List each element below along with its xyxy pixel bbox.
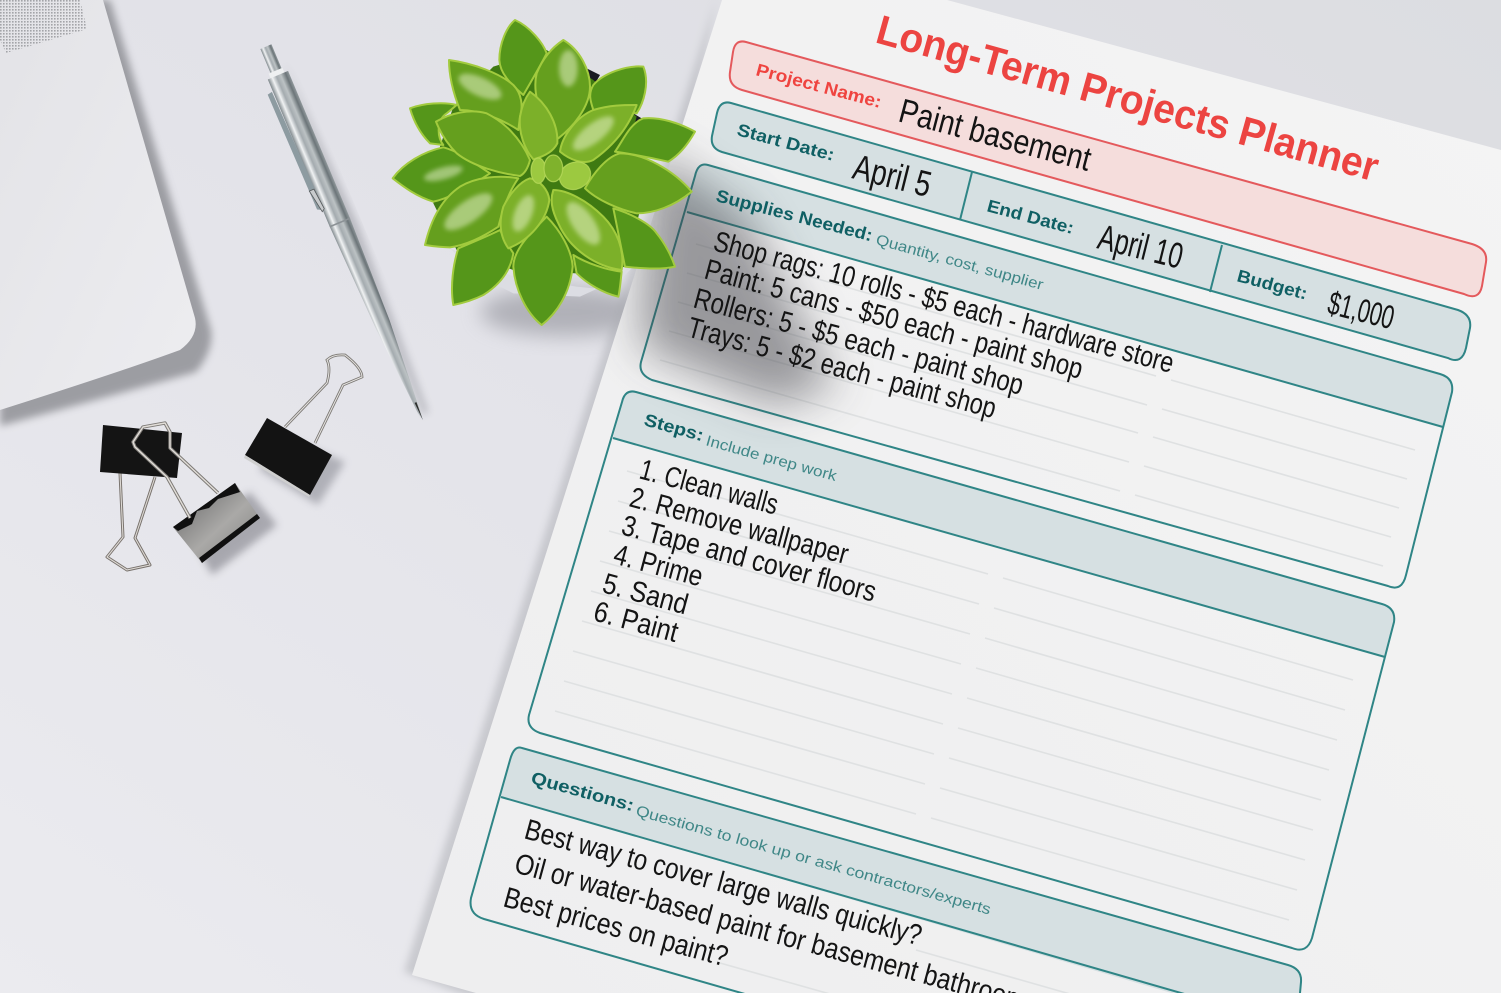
supplies list: Shop rags: 10 rolls - $5 each - hardware store [710, 226, 1177, 380]
page sheet [412, 0, 1501, 993]
panel: dates and budget [712, 102, 1470, 360]
clip 2 shadow [190, 492, 277, 575]
questions hint: Questions to look up or ask contractors/experts [634, 802, 993, 918]
clip 2 black edges [173, 483, 260, 563]
planner page [404, 0, 1501, 993]
steps list: 3. Tape and cover floors [618, 510, 880, 609]
budget label: Budget: [1235, 266, 1310, 303]
budget value: $1,000 [1324, 284, 1398, 336]
questions heading: Questions: [529, 768, 636, 815]
supplies hint: Quantity, cost, supplier [874, 231, 1045, 294]
shadow of plant on desk [480, 288, 650, 336]
clip 3 shadow [260, 430, 345, 505]
icon: succulent plant [393, 20, 695, 325]
pot and dark soil [433, 50, 642, 297]
panel: supplies needed [640, 164, 1452, 588]
leaf highlights [422, 50, 619, 250]
steps list: 1. Clean walls [636, 454, 782, 522]
outer leaves [393, 20, 695, 325]
supplies list: Trays: 5 - $2 each - paint shop [684, 312, 1000, 425]
supplies list: Paint: 5 cans - $50 each - paint shop [701, 254, 1086, 386]
binder clips [100, 355, 362, 575]
clip 1 black body [100, 425, 182, 478]
clip 2 wire [133, 423, 218, 518]
clip 3 black body [245, 418, 332, 495]
page drop shadow [404, 0, 716, 993]
end date label: End Date: [985, 196, 1076, 238]
project name label: Project Name: [754, 60, 884, 112]
steps list: 4. Prime [610, 539, 706, 593]
pen [250, 40, 438, 427]
end date value: April 10 [1094, 216, 1187, 277]
steps heading: Steps: [642, 410, 706, 445]
dark green underlay filling gaps between leaves [433, 50, 640, 273]
panel: questions [471, 748, 1301, 993]
inner leaves [501, 92, 637, 270]
steps hint: Include prep work [704, 432, 839, 485]
steps list: 2. Remove wallpaper [626, 482, 852, 571]
middle leaves [425, 40, 692, 247]
steps list [590, 454, 880, 649]
laptop corner [0, 0, 211, 426]
clip 3 wire [285, 355, 362, 443]
start date label: Start Date: [735, 120, 837, 165]
project name value: Paint basement [895, 92, 1096, 179]
panel: project name [730, 41, 1486, 296]
steps list: 6. Paint [590, 596, 682, 649]
panel: steps [528, 391, 1394, 950]
questions list: Best way to cover large walls quickly? [521, 814, 925, 952]
laptop speaker grille [0, 0, 87, 53]
title: Long-Term Projects Planner [872, 6, 1384, 190]
supplies heading: Supplies Needed: [714, 186, 875, 245]
plant shadow across page [640, 150, 835, 405]
rosette centre buds [531, 155, 595, 195]
pen pocket clip [267, 91, 323, 212]
clip 1 back wire [107, 473, 155, 570]
clip 2 silver body [173, 483, 260, 563]
steps list: 5. Sand [599, 568, 692, 621]
start date value: April 5 [849, 146, 936, 205]
questions list: Best prices on paint? [500, 882, 731, 973]
supplies list: Rollers: 5 - $5 each - paint shop [690, 283, 1027, 402]
